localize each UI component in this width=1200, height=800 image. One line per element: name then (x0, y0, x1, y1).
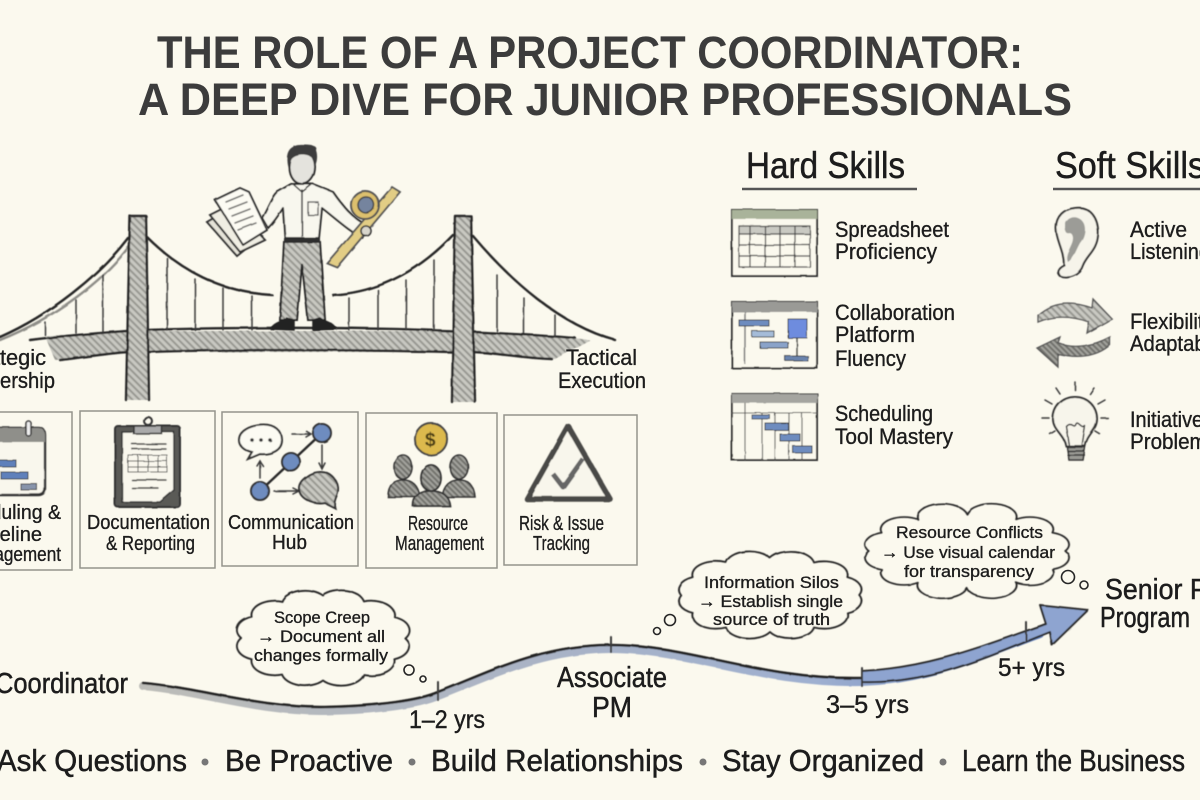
text: collaboration platform fluency: Collaboration (835, 300, 955, 325)
panel: risk and issue tracking (504, 415, 637, 565)
panel label (87, 512, 210, 555)
text: spreadsheet proficiency: Proficiency (835, 239, 937, 264)
label: tactical execution: Execution (558, 368, 646, 393)
icon: ear (1056, 208, 1098, 277)
panel: resource management (366, 413, 497, 568)
duration: 3-5 years: 3–5 yrs (826, 691, 909, 719)
bottom tips strip: Build Relationships (431, 743, 683, 778)
bridge illustration (0, 216, 615, 402)
text: scheduling tool mastery (835, 401, 953, 449)
text: collaboration platform fluency (835, 300, 955, 371)
icon: ruler and tape (327, 187, 400, 267)
title: A DEEP DIVE FOR JUNIOR PROFESSIONALS (138, 74, 1072, 125)
icon: communication network (239, 424, 338, 508)
text: collaboration platform fluency: Platform (835, 322, 915, 347)
callout: information silos: → Establish single (698, 592, 843, 611)
callout: scope creep (237, 590, 426, 686)
panel: documentation and reporting (80, 411, 215, 568)
duration: 5+ years: 5+ yrs (998, 654, 1065, 682)
text: initiative and problem solving (1130, 407, 1200, 454)
panel label: Risk & Issue (519, 513, 604, 535)
duration: 1-2 years: 1–2 yrs (409, 706, 485, 734)
icon: people and coin: $ (425, 430, 436, 451)
panel label (228, 512, 354, 554)
panel: soft skills (1037, 145, 1200, 460)
callout: information silos (654, 551, 861, 639)
title: THE ROLE OF A PROJECT COORDINATOR: (157, 27, 1023, 78)
panel label (0, 502, 62, 566)
milestone: associate pm: Associate (557, 662, 667, 694)
text: active listening: Active (1130, 217, 1187, 242)
icon: collaboration platform (732, 302, 817, 368)
text: spreadsheet proficiency: Spreadsheet (835, 217, 949, 242)
callout: resource conflicts: → Use visual calendar (881, 543, 1055, 562)
panel: hard skills (732, 145, 955, 460)
panel: scheduling and timeline management (0, 412, 72, 570)
label: tactical execution: Tactical (566, 345, 637, 370)
callout: resource conflicts (865, 504, 1088, 598)
callout: information silos: source of truth (713, 610, 830, 629)
callout: resource conflicts: Resource Conflicts (896, 523, 1043, 542)
milestone: associate pm: PM (592, 692, 632, 724)
bottom tips strip: Ask Questions (0, 743, 187, 778)
text: spreadsheet proficiency (835, 217, 949, 264)
label: strategic leadership (0, 345, 55, 393)
panel label: & Reporting (106, 533, 195, 555)
text: flexibility and adaptability (1130, 309, 1200, 356)
milestone: senior pm / program manager (1100, 574, 1200, 634)
milestone: associate pm (557, 662, 667, 724)
bottom tips strip: Stay Organized (722, 743, 924, 778)
icon: warning triangle (527, 426, 610, 499)
icon: clipboard (115, 417, 180, 507)
label: tactical execution (558, 345, 646, 393)
panel label: Hub (272, 532, 307, 554)
icon: spreadsheet (732, 210, 817, 276)
text: scheduling tool mastery: Scheduling (835, 401, 933, 426)
bottom tips strip: Be Proactive (225, 743, 393, 778)
text: collaboration platform fluency: Fluency (835, 346, 906, 371)
callout: scope creep: Scope Creep (274, 608, 370, 627)
icon: scheduling tool (732, 394, 817, 460)
icon: people and coin (388, 423, 475, 506)
callout: resource conflicts: for transparency (904, 562, 1035, 581)
callout: scope creep: → Document all (257, 627, 385, 646)
heading: hard skills: Hard Skills (746, 145, 905, 186)
bottom tips strip (0, 743, 1185, 778)
icon: documents (207, 188, 267, 256)
text: scheduling tool mastery: Tool Mastery (835, 424, 953, 449)
panel label (395, 513, 484, 555)
panel label (519, 513, 604, 555)
callout: information silos: Information Silos (704, 573, 839, 592)
icon: light bulb (1042, 382, 1108, 460)
panel: communication hub (222, 412, 358, 566)
panel label: Tracking (533, 533, 590, 555)
text: active listening (1130, 217, 1200, 264)
panel label: Documentation (87, 512, 210, 534)
career path arrow (143, 605, 1088, 711)
panel label: Resource (408, 513, 468, 535)
icon: cycle arrows (1037, 299, 1112, 367)
icon: coordinator figure (262, 145, 368, 330)
icon: calendar (0, 421, 45, 495)
title (138, 27, 1072, 125)
panel label: Management (395, 533, 484, 555)
callout: scope creep: changes formally (254, 646, 389, 665)
panel label: Communication (228, 512, 354, 534)
